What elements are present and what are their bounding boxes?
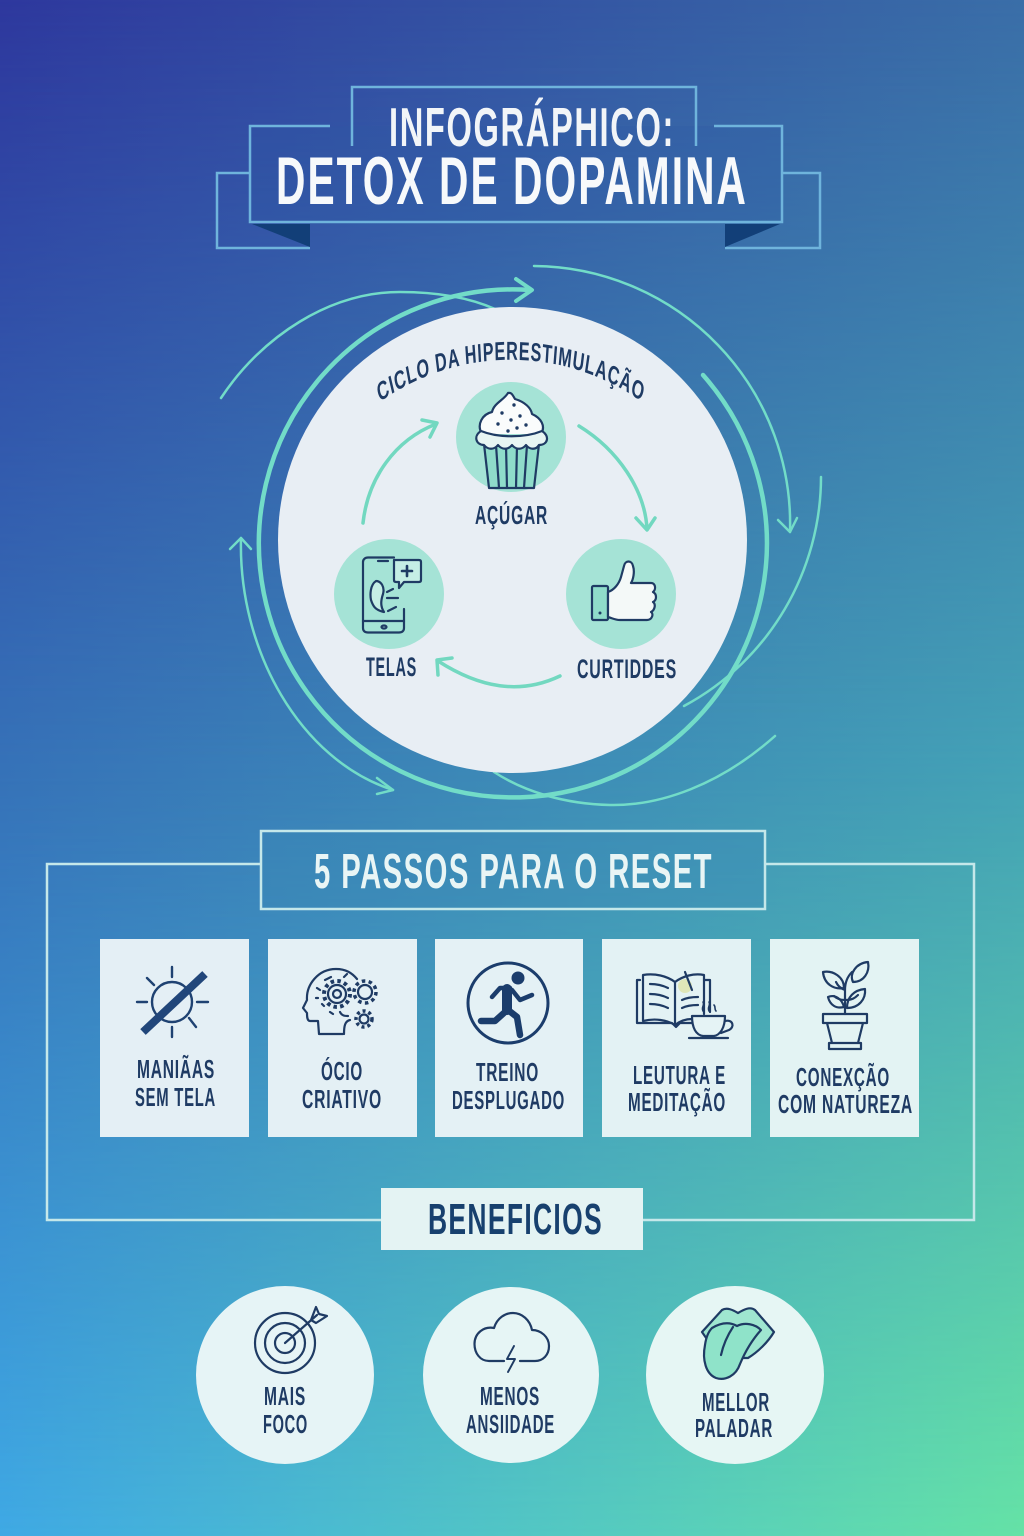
label: TELAS: [366, 652, 417, 682]
card: conexão com natureza: [770, 939, 919, 1137]
icon: storm cloud: [474, 1313, 549, 1372]
card: leitura e meditação: MEDITAÇÃO: [628, 1087, 726, 1117]
label: MENOS: [480, 1381, 540, 1411]
label: MELLOR: [702, 1387, 770, 1417]
label: LEUTURA E: [633, 1060, 726, 1090]
benefits heading: BENEFICIOS: [428, 1195, 603, 1244]
thin arc top right: [534, 266, 790, 532]
benefits heading: [381, 1188, 643, 1250]
curved heading: CICLO DA HIPERESTIMULAÇÃO: [378, 342, 644, 400]
label: MANIÃAS: [137, 1054, 215, 1084]
right ribbon fold: [725, 224, 780, 247]
benefit: mais foco: FOCO: [263, 1409, 308, 1439]
inner cycle arrows: [363, 420, 655, 687]
benefit: melhor paladar: [646, 1286, 824, 1464]
label: CONEXÇÃO: [796, 1062, 890, 1092]
icon: thumbs up: [592, 562, 656, 620]
thin arc right: [684, 477, 821, 706]
node: açúcar: [456, 382, 566, 530]
benefit: menos ansiedade: ANSIIDADE: [466, 1409, 555, 1439]
card: ócio criativo: CRIATIVO: [302, 1084, 382, 1114]
benefit: mais foco: [196, 1286, 374, 1464]
steps heading: 5 PASSOS PARA O RESET: [314, 845, 713, 899]
label: TREINO: [476, 1057, 539, 1087]
central cycle disc: [278, 307, 747, 773]
icon: tongue and lips: [702, 1308, 774, 1379]
icon: book and cup: [637, 972, 732, 1038]
icon: runner in circle: [468, 963, 548, 1043]
panel: 5 passos frame: [47, 831, 974, 1220]
node: telas: [334, 539, 444, 682]
icon: phone with chat: [363, 558, 421, 632]
card: leitura e meditação: [602, 939, 751, 1137]
icon: target with dart: [255, 1307, 327, 1373]
card: conexão com natureza: COM NATUREZA: [778, 1089, 913, 1119]
icon: cupcake: [476, 393, 547, 488]
label: MAIS: [264, 1381, 306, 1411]
card: manhãs sem tela: SEM TELA: [135, 1082, 216, 1112]
card: treino desplugado: [435, 939, 583, 1137]
steps heading: [261, 831, 765, 909]
thin double arc left: [241, 538, 393, 790]
card: ócio criativo: [268, 939, 417, 1137]
icon: crossed sun: [137, 967, 208, 1037]
icon: potted plant: [823, 962, 868, 1049]
label: ÓCIO: [321, 1056, 363, 1086]
title banner: [217, 87, 820, 248]
benefit: menos ansiedade: [423, 1287, 599, 1463]
card: treino desplugado: DESPLUGADO: [452, 1085, 565, 1115]
node: curtidas: [566, 539, 677, 684]
thick ring arrow: [259, 289, 767, 797]
thin arc top left: [221, 292, 495, 398]
card: manhãs sem tela: [100, 939, 249, 1137]
title line 1: INFOGRÁPHICO:: [389, 96, 675, 158]
cycle outer arrows: [221, 266, 821, 805]
benefit: melhor paladar: PALADAR: [695, 1413, 773, 1443]
label: CURTIDDES: [577, 654, 677, 684]
label: AÇÚGAR: [475, 500, 548, 530]
left ribbon fold: [252, 224, 310, 247]
thin arc bottom: [494, 736, 775, 805]
icon: head with gears: [303, 969, 376, 1034]
